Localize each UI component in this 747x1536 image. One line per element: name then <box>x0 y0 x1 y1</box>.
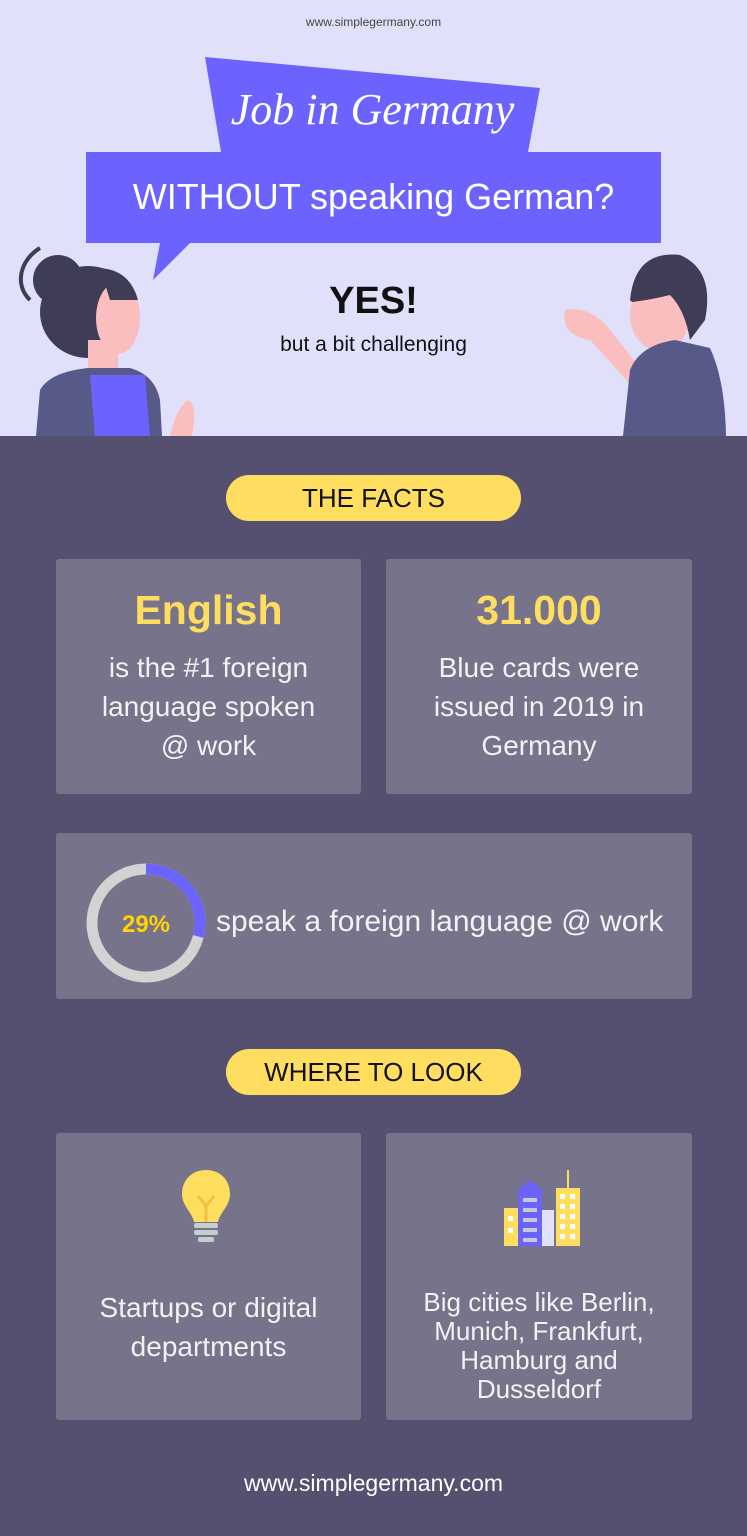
subtitle question: WITHOUT speaking German? <box>133 176 614 217</box>
donut chart 29%: 29% <box>122 911 170 938</box>
text: big cities: Big cities like Berlin, <box>423 1287 655 1317</box>
title: Job in Germany: Job in Germany <box>231 85 514 134</box>
stat: English: English <box>134 587 283 633</box>
stat: 31.000: 31.000 <box>476 587 602 633</box>
illustration: man <box>564 254 726 436</box>
site url top: www.simplegermany.com <box>306 15 441 29</box>
text: english description: is the #1 foreign <box>109 652 308 683</box>
panel: English fact <box>56 559 361 794</box>
text: big cities: Dusseldorf <box>477 1374 601 1404</box>
text: startups <box>100 1292 317 1362</box>
panel: 29% foreign language <box>56 833 692 999</box>
panel: startups <box>56 1133 361 1420</box>
text: big cities: Munich, Frankfurt, <box>434 1316 644 1346</box>
pill heading: WHERE TO LOOK: WHERE TO LOOK <box>264 1057 483 1087</box>
text: speak a foreign language: speak a foreign language @ work <box>216 905 663 938</box>
text: blue cards description: issued in 2019 in <box>434 691 644 722</box>
donut chart 29% <box>86 864 206 982</box>
top header section <box>0 0 747 436</box>
YES answer: YES! <box>329 280 418 322</box>
icon: city buildings <box>504 1170 580 1246</box>
speech bubble <box>86 57 661 280</box>
text: english description: @ work <box>161 730 256 761</box>
text: english description <box>102 652 315 761</box>
text: blue cards description: Germany <box>481 730 597 761</box>
answer subtext: but a bit challenging <box>280 333 467 356</box>
illustration: woman <box>18 246 194 436</box>
panel: blue cards fact <box>386 559 692 794</box>
text: english description: language spoken <box>102 691 315 722</box>
panel: big cities <box>386 1133 692 1420</box>
text: big cities <box>423 1287 655 1404</box>
text: blue cards description: Blue cards were <box>439 652 639 683</box>
text: startups: Startups or digital <box>100 1292 317 1323</box>
text: big cities: Hamburg and <box>460 1345 618 1375</box>
pill heading: THE FACTS: THE FACTS <box>302 483 445 513</box>
text: startups: departments <box>131 1331 286 1362</box>
pill heading: WHERE TO LOOK <box>226 1049 521 1095</box>
footer url: www.simplegermany.com <box>244 1470 503 1496</box>
text: blue cards description <box>434 652 644 761</box>
pill heading: THE FACTS <box>226 475 521 521</box>
icon: light bulb <box>182 1170 230 1242</box>
